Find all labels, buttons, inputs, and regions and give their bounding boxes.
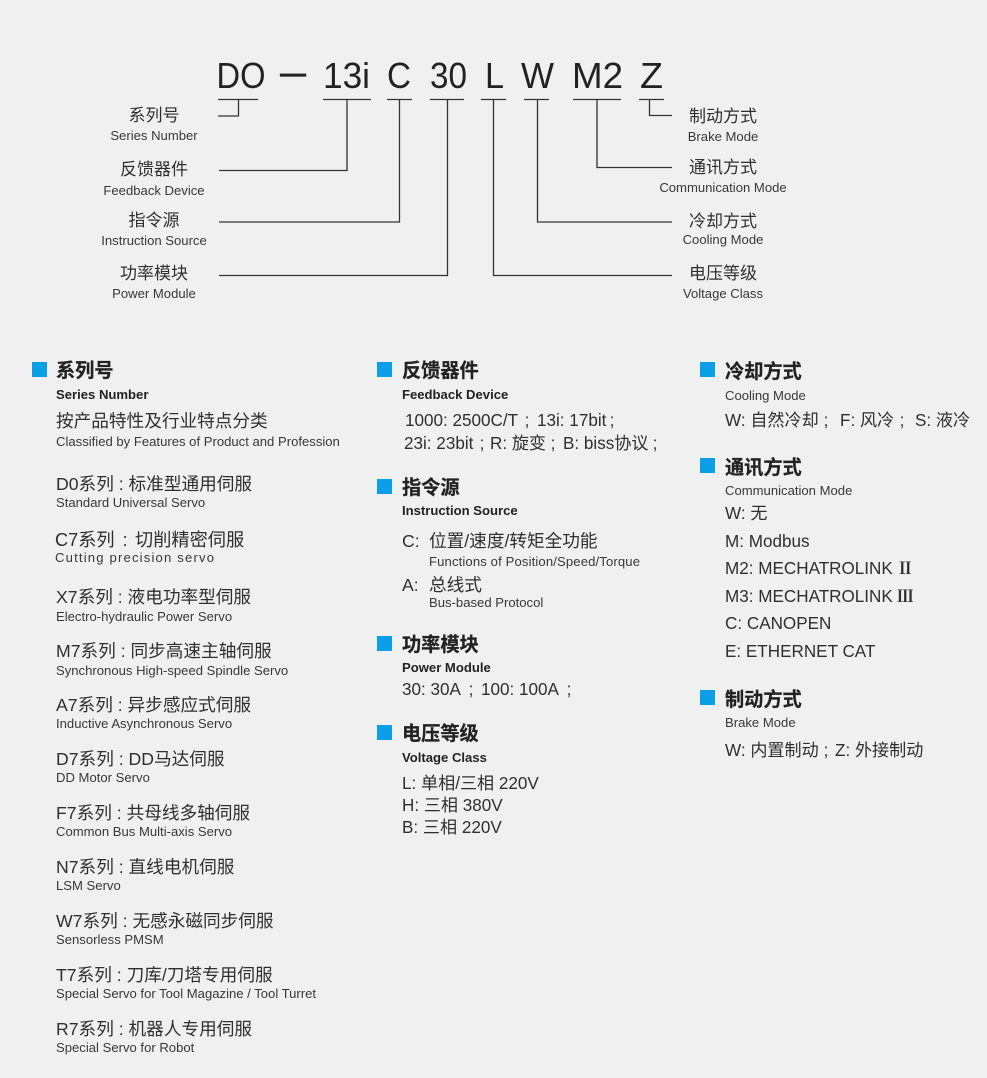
right diagram labels: Cooling Mode [683, 232, 763, 247]
heading: series number: 系列号 [56, 360, 114, 382]
instruction options [402, 531, 640, 610]
heading: cooling mode: Cooling Mode [725, 388, 806, 403]
left diagram labels: 系列号 [128, 106, 180, 125]
power options: 100: 100A [481, 680, 560, 699]
heading: communication mode: 通讯方式 [725, 456, 802, 479]
icon: blue square [700, 458, 715, 473]
heading: brake mode: Brake Mode [725, 715, 796, 730]
icon: blue square [377, 479, 392, 494]
voltage options: H: 三相 380V [402, 796, 503, 815]
feedback options [404, 411, 657, 453]
left diagram labels: 反馈器件 [120, 160, 188, 179]
icon: blue square [32, 362, 47, 377]
brake options: Z: 外接制动 [835, 741, 923, 760]
power options: ; [567, 680, 571, 699]
right diagram labels: 制动方式 [689, 107, 757, 126]
voltage options [402, 774, 539, 837]
series list: Synchronous High-speed Spindle Servo [56, 663, 288, 678]
panel: voltage class [377, 722, 539, 837]
feedback options: ; [480, 434, 484, 453]
series list [55, 474, 316, 1055]
feedback options: B: biss协议 [563, 434, 648, 453]
feedback options: 1000: 2500C/T [405, 411, 518, 430]
communication options: Ⅱ [897, 555, 914, 579]
instruction options: Bus-based Protocol [429, 595, 543, 610]
series list: D0系列 : 标准型通用伺服 [56, 474, 252, 494]
panel: cooling mode [700, 360, 970, 430]
left diagram labels [101, 106, 207, 301]
heading: series number: Series Number [56, 387, 148, 402]
series list: M7系列 : 同步高速主轴伺服 [56, 641, 272, 661]
series list: W7系列 : 无感永磁同步伺服 [56, 911, 274, 931]
right diagram labels: 通讯方式 [689, 158, 757, 177]
icon: blue square [377, 362, 392, 377]
icon: blue square [700, 690, 715, 705]
panel: communication mode [700, 456, 914, 661]
heading: power module [402, 634, 491, 675]
left diagram labels: 指令源 [128, 211, 180, 230]
heading: series number [56, 360, 148, 402]
feedback options: ; [525, 411, 529, 430]
communication options: E: ETHERNET CAT [725, 642, 876, 661]
heading: brake mode [725, 688, 802, 730]
right diagram labels: Voltage Class [683, 286, 763, 301]
heading: power module: Power Module [402, 660, 491, 675]
heading: feedback device: 反馈器件 [402, 360, 479, 382]
model code letters: C [387, 55, 411, 96]
instruction options: Functions of Position/Speed/Torque [429, 554, 640, 569]
series list: Electro-hydraulic Power Servo [56, 609, 232, 624]
model code letters: 一 [279, 61, 307, 92]
communication options [725, 504, 914, 661]
model code letters [216, 55, 663, 96]
panel: series number [32, 360, 340, 1055]
right diagram labels: 电压等级 [689, 264, 757, 283]
left diagram labels: Instruction Source [101, 233, 207, 248]
panel: power module [377, 634, 571, 699]
heading: voltage class: Voltage Class [402, 750, 487, 765]
cooling options: F: 风冷 [840, 411, 894, 430]
feedback options: 13i: 17bit [537, 411, 607, 430]
cooling options: ; [900, 411, 904, 430]
communication options: M2: MECHATROLINK [725, 559, 893, 578]
series description: 按产品特性及行业特点分类 [56, 411, 268, 431]
communication options: W: 无 [725, 504, 767, 523]
series list: Sensorless PMSM [56, 932, 164, 947]
series list: : [122, 530, 128, 550]
instruction options: 位置/速度/转矩全功能 [429, 531, 598, 551]
power options: 30: 30A [402, 680, 461, 699]
model code letters: M2 [572, 55, 623, 96]
heading: brake mode: 制动方式 [725, 688, 802, 711]
heading: power module: 功率模块 [402, 634, 479, 656]
icon: blue square [700, 362, 715, 377]
heading: feedback device: Feedback Device [402, 387, 508, 402]
series list: C7系列 [55, 530, 115, 550]
series list: Inductive Asynchronous Servo [56, 716, 232, 731]
instruction options: 总线式 [429, 575, 482, 595]
panel: brake mode [700, 688, 923, 760]
model code letters: 13i [323, 55, 370, 96]
right diagram labels: Brake Mode [688, 129, 758, 144]
series list: T7系列 : 刀库/刀塔专用伺服 [56, 965, 273, 985]
series list: Cutting precision servo [55, 550, 214, 565]
series list: DD Motor Servo [56, 770, 150, 785]
right diagram labels: 冷却方式 [689, 212, 757, 231]
cooling options: S: 液冷 [915, 411, 970, 430]
heading: feedback device [402, 360, 508, 402]
series list: Special Servo for Tool Magazine / Tool Turret [56, 986, 316, 1001]
icon: blue square [377, 636, 392, 651]
voltage options: B: 三相 220V [402, 818, 502, 837]
series list: A7系列 : 异步感应式伺服 [56, 695, 251, 715]
cooling options: W: 自然冷却 [725, 411, 819, 430]
icon: blue square [377, 725, 392, 740]
series list: LSM Servo [56, 878, 121, 893]
panel: instruction source [377, 476, 640, 610]
heading: cooling mode [725, 360, 806, 403]
heading: voltage class [402, 722, 487, 765]
left diagram labels: Series Number [110, 128, 198, 143]
left diagram labels: Feedback Device [103, 183, 205, 198]
heading: communication mode [725, 456, 852, 498]
connector lines [218, 100, 672, 276]
voltage options: L: 单相/三相 220V [402, 774, 539, 793]
instruction options: C: [402, 531, 420, 551]
feedback options: R: 旋变 [490, 434, 546, 453]
right diagram labels [659, 107, 787, 301]
right diagram labels: Communication Mode [659, 180, 787, 195]
series list: R7系列 : 机器人专用伺服 [56, 1019, 252, 1039]
communication options: Ⅲ [897, 583, 914, 607]
instruction options: A: [402, 575, 419, 595]
series description [56, 411, 340, 449]
brake options: ; [824, 741, 828, 760]
series list: Special Servo for Robot [56, 1040, 195, 1055]
panel: feedback device [377, 360, 657, 453]
series list: Standard Universal Servo [56, 495, 205, 510]
series list: F7系列 : 共母线多轴伺服 [56, 803, 250, 823]
heading: communication mode: Communication Mode [725, 483, 852, 498]
model code letters: Z [640, 55, 663, 96]
model code letters: L [485, 55, 504, 96]
series list: X7系列 : 液电功率型伺服 [56, 587, 251, 607]
model code letters: W [521, 55, 554, 96]
series list: Common Bus Multi-axis Servo [56, 824, 232, 839]
heading: voltage class: 电压等级 [402, 722, 479, 745]
power options: ; [469, 680, 473, 699]
heading: instruction source: Instruction Source [402, 503, 518, 518]
cooling options: ; [824, 411, 828, 430]
left diagram labels: 功率模块 [120, 264, 188, 283]
feedback options: ; [610, 411, 614, 430]
heading: cooling mode: 冷却方式 [725, 360, 802, 383]
heading: instruction source [402, 476, 518, 518]
series list: N7系列 : 直线电机伺服 [56, 857, 235, 877]
communication options: M3: MECHATROLINK [725, 587, 893, 606]
series description: Classified by Features of Product and Profession [56, 434, 340, 449]
heading: instruction source: 指令源 [402, 476, 460, 499]
left diagram labels: Power Module [112, 286, 196, 301]
model code letters: DO [216, 55, 266, 96]
feedback options: ; [551, 434, 555, 453]
communication options: C: CANOPEN [725, 614, 831, 633]
feedback options: ; [653, 434, 657, 453]
communication options: M: Modbus [725, 532, 810, 551]
feedback options: 23i: 23bit [404, 434, 473, 453]
series list: D7系列 : DD马达伺服 [56, 749, 225, 769]
brake options: W: 内置制动 [725, 741, 819, 760]
series list: 切削精密伺服 [135, 530, 244, 550]
model code letters: 30 [430, 55, 467, 96]
